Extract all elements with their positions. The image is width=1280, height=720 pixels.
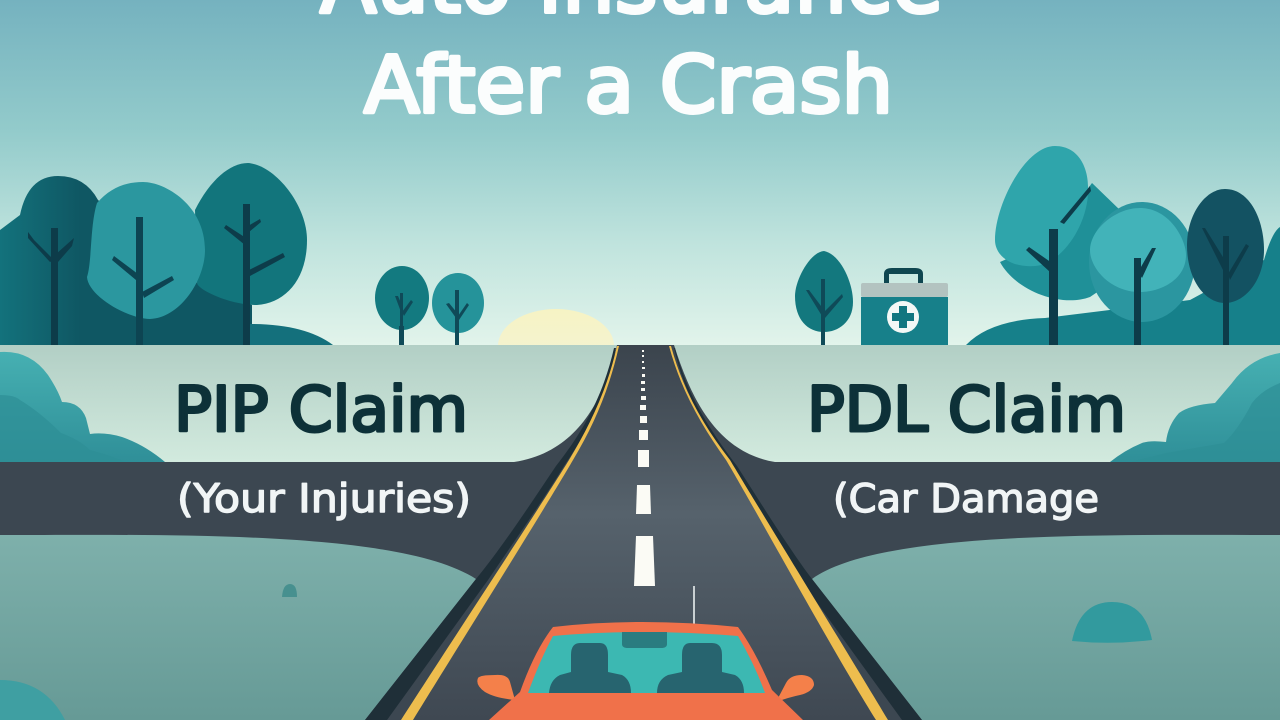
right seat	[657, 643, 744, 693]
title	[320, 0, 943, 131]
sun on horizon	[498, 309, 614, 383]
side road and asphalt base	[0, 345, 1280, 720]
road centre dashes	[634, 350, 655, 586]
right bushes	[1110, 353, 1280, 462]
left seat	[549, 643, 631, 693]
main road surface	[407, 345, 882, 720]
PDL Claim heading: PDL Claim	[807, 373, 1126, 446]
small mound left	[282, 584, 297, 597]
PIP Claim heading: PIP Claim	[174, 373, 468, 446]
title: After a Crash	[364, 41, 893, 131]
road dark edges	[365, 348, 922, 720]
left tree cluster	[0, 163, 333, 345]
small tree right	[795, 251, 853, 345]
Car Damage label: (Car Damage	[833, 477, 1099, 522]
rear-view mirror	[622, 632, 667, 648]
bottom-left bush	[0, 680, 65, 720]
upper ground left	[0, 345, 617, 462]
road yellow lines	[401, 346, 888, 720]
windshield	[528, 632, 765, 693]
mound right	[1072, 602, 1152, 643]
left mirror	[477, 675, 515, 700]
right tree cluster	[966, 146, 1280, 345]
Your Injuries label: (Your Injuries)	[177, 477, 471, 522]
antenna	[693, 586, 695, 624]
lower ground right	[812, 535, 1280, 720]
car body	[489, 622, 803, 720]
car	[477, 586, 814, 720]
icon: first aid kit	[861, 268, 948, 347]
lower ground left	[0, 535, 476, 720]
small trees left	[375, 266, 484, 345]
upper ground right	[674, 345, 1280, 462]
right mirror	[776, 675, 814, 702]
left bushes	[0, 352, 165, 462]
sky background	[0, 0, 1280, 346]
